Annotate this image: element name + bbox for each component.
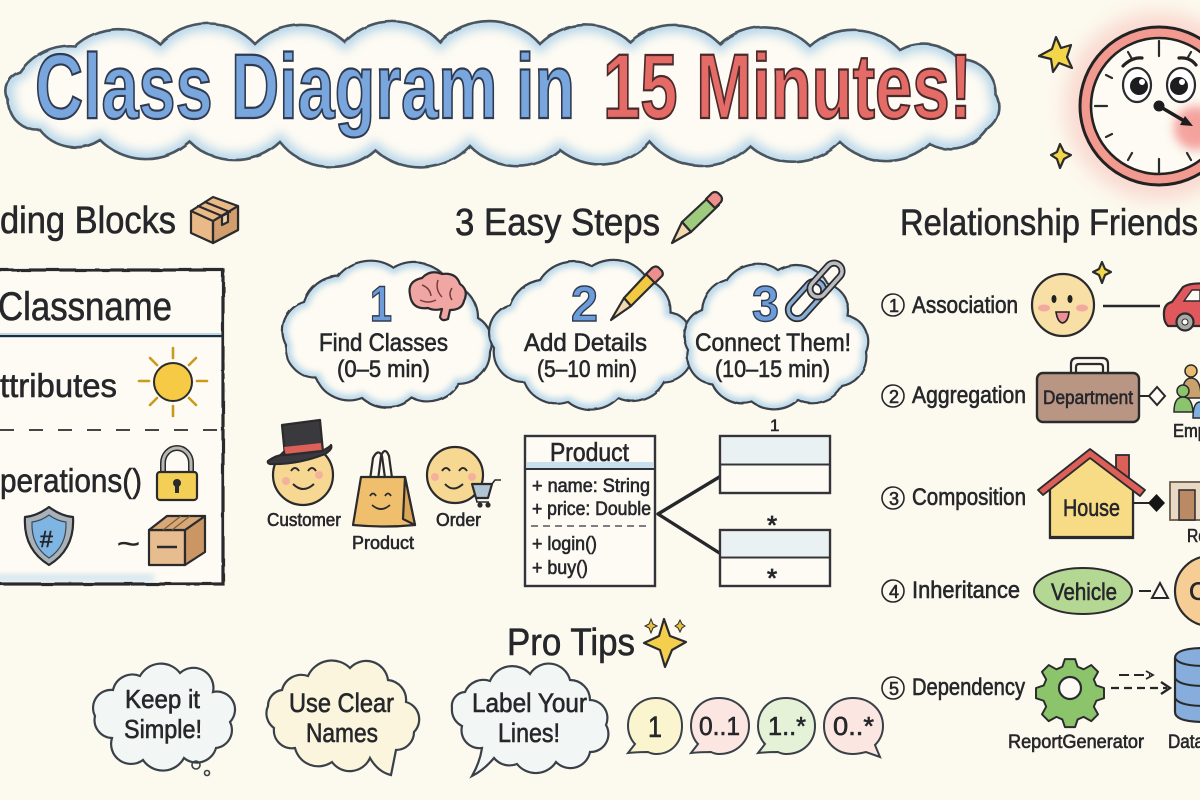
step 3 cloud xyxy=(684,260,868,409)
number badge 2: 2 xyxy=(889,387,899,407)
method buy: + buy() xyxy=(532,558,588,579)
product class box xyxy=(525,436,655,586)
number badge 1 xyxy=(882,294,904,316)
clock hand xyxy=(1154,100,1193,126)
heading: 3 Easy Steps xyxy=(455,202,660,244)
aggregation label: Aggregation xyxy=(912,382,1026,409)
dashed arrows xyxy=(1111,671,1170,694)
method login: + login() xyxy=(532,534,597,555)
order face with cart xyxy=(427,447,501,508)
clock glow xyxy=(1065,12,1200,200)
step 2 text: Add Details xyxy=(524,329,647,357)
number badge 3 xyxy=(882,487,904,509)
row 4: inheritance xyxy=(882,556,1200,626)
dependency label: Dependency xyxy=(912,674,1025,701)
number 3: 3 xyxy=(752,276,779,332)
icon: pencil xyxy=(611,266,663,320)
tip bubble: use clear names xyxy=(266,661,419,775)
step 3 text: Connect Them! xyxy=(695,329,851,357)
association line xyxy=(1103,305,1160,307)
title text: red part: 15 Minutes! xyxy=(603,36,972,138)
classname label: Classname xyxy=(0,285,172,329)
icon: clock with stars xyxy=(1039,12,1200,200)
smiling face xyxy=(1032,274,1094,336)
shopping bag xyxy=(353,451,415,526)
multiplicity bubble 0..1: 0..1 xyxy=(699,711,740,741)
number badge 5: 5 xyxy=(889,679,899,699)
heading: Pro Tips xyxy=(507,622,635,664)
gear xyxy=(1036,659,1104,727)
association label: Association xyxy=(912,292,1018,319)
icon: heading pencil xyxy=(672,192,722,243)
icon: star xyxy=(1039,37,1072,72)
icon: shield protected: # xyxy=(40,526,53,552)
step 1 text: Find Classes xyxy=(319,329,448,357)
title banner xyxy=(6,21,999,167)
package symbol: ~ xyxy=(117,529,140,559)
cloud 3 shape xyxy=(684,264,868,409)
class example: product xyxy=(525,436,655,586)
step 1 cloud xyxy=(282,261,492,407)
open diamond connector xyxy=(1139,387,1165,405)
briefcase xyxy=(1037,358,1139,422)
number badge 5 xyxy=(882,677,904,699)
order label: Order xyxy=(436,510,481,530)
package symbol xyxy=(117,516,205,565)
vehicle ellipse: Vehicle xyxy=(1051,579,1117,606)
number badge 1: 1 xyxy=(889,296,899,316)
text line 1: Keep it xyxy=(125,684,201,714)
text line 1: Use Clear xyxy=(289,688,394,718)
number badge 3: 3 xyxy=(889,489,899,509)
icon: cardboard box xyxy=(191,197,238,243)
sparkle xyxy=(1093,262,1111,283)
icon: sparkles xyxy=(644,619,686,667)
attribute name: + name: String xyxy=(532,476,650,497)
step 1 time: (0–5 min) xyxy=(337,356,430,383)
composition label: Composition xyxy=(912,484,1026,511)
house: House xyxy=(1063,495,1120,522)
row 2: aggregation xyxy=(882,358,1200,441)
car xyxy=(1164,283,1200,330)
text line 2: Simple! xyxy=(124,714,202,744)
vehicle ellipse xyxy=(1034,568,1132,614)
cloud 1 shape xyxy=(282,261,492,407)
multiplicity bubble 0..*: 0..* xyxy=(833,711,874,741)
number badge 4 xyxy=(882,580,904,602)
number badge 4: 4 xyxy=(889,582,899,602)
product class title: Product xyxy=(550,437,630,467)
panel: pro tips xyxy=(93,619,883,776)
related class box bottom xyxy=(720,530,830,586)
icon: shield protected xyxy=(25,507,73,565)
candidate classes xyxy=(267,420,501,553)
row 1: association xyxy=(882,262,1200,336)
panel: building blocks xyxy=(0,197,238,584)
multiplicity bubble 1 xyxy=(628,698,682,754)
room xyxy=(1170,482,1200,520)
briefcase: Department xyxy=(1043,388,1134,409)
multiplicity star lower: * xyxy=(767,563,777,593)
tip bubble: keep it simple xyxy=(93,664,235,776)
car circle xyxy=(1175,556,1200,626)
step 2 cloud xyxy=(489,260,693,410)
multiplicity 1: 1 xyxy=(770,416,779,435)
icon: sparkle xyxy=(1051,144,1071,168)
house xyxy=(1038,449,1145,538)
thought cloud xyxy=(93,664,235,771)
multiplicity star upper: * xyxy=(767,510,777,540)
multiplicity bubble 1..* xyxy=(758,698,815,754)
people group xyxy=(1174,365,1200,418)
related class box top xyxy=(720,436,830,493)
attribute price: + price: Double xyxy=(532,499,651,520)
icon: brain xyxy=(410,272,466,320)
number badge 2 xyxy=(882,385,904,407)
cloud 2 shape xyxy=(489,260,693,410)
clock face xyxy=(1080,27,1200,185)
number 1: 1 xyxy=(370,276,392,332)
panel: relationship friends xyxy=(882,202,1200,753)
tip bubble: label your lines xyxy=(452,664,608,776)
attributes label: ttributes xyxy=(0,367,117,404)
panel: three easy steps xyxy=(267,192,868,593)
multiplicity bubble 1..*: 1..* xyxy=(768,711,806,741)
step 2 time: (5–10 min) xyxy=(537,356,637,383)
text line 2: Names xyxy=(306,718,378,748)
title text: blue part: Class Diagram in xyxy=(35,36,575,138)
multiplicity bubble 1: 1 xyxy=(648,711,662,744)
report generator label: ReportGenerator xyxy=(1008,732,1145,753)
product label: Product xyxy=(352,533,414,553)
speech cloud xyxy=(452,664,608,776)
operations label: perations() xyxy=(0,462,142,499)
class card xyxy=(0,270,223,584)
row 3: composition xyxy=(882,449,1200,546)
inheritance label: Inheritance xyxy=(912,577,1020,604)
multiplicity bubble 0..* xyxy=(824,698,883,757)
speech cloud xyxy=(266,661,419,775)
step 3 time: (10–15 min) xyxy=(715,356,830,383)
number 2: 2 xyxy=(571,276,598,332)
text line 1: Label Your xyxy=(472,688,587,718)
filled diamond connector xyxy=(1133,494,1165,512)
customer label: Customer xyxy=(267,510,341,530)
thought dots xyxy=(192,761,210,776)
clock eyes xyxy=(1123,58,1196,102)
text line 2: Lines! xyxy=(498,718,560,748)
multiplicity bubble 0..1 xyxy=(691,698,749,754)
icon: padlock xyxy=(157,448,197,500)
icon: chain xyxy=(785,260,845,322)
icon: sun xyxy=(139,348,207,416)
heading: ding Blocks xyxy=(0,200,176,242)
row 5: dependency xyxy=(882,648,1200,753)
inheritance arrow xyxy=(1139,583,1168,598)
database xyxy=(1175,648,1200,722)
customer face with hat xyxy=(268,420,333,505)
title cloud shape xyxy=(6,21,999,167)
connector lines xyxy=(658,476,721,554)
